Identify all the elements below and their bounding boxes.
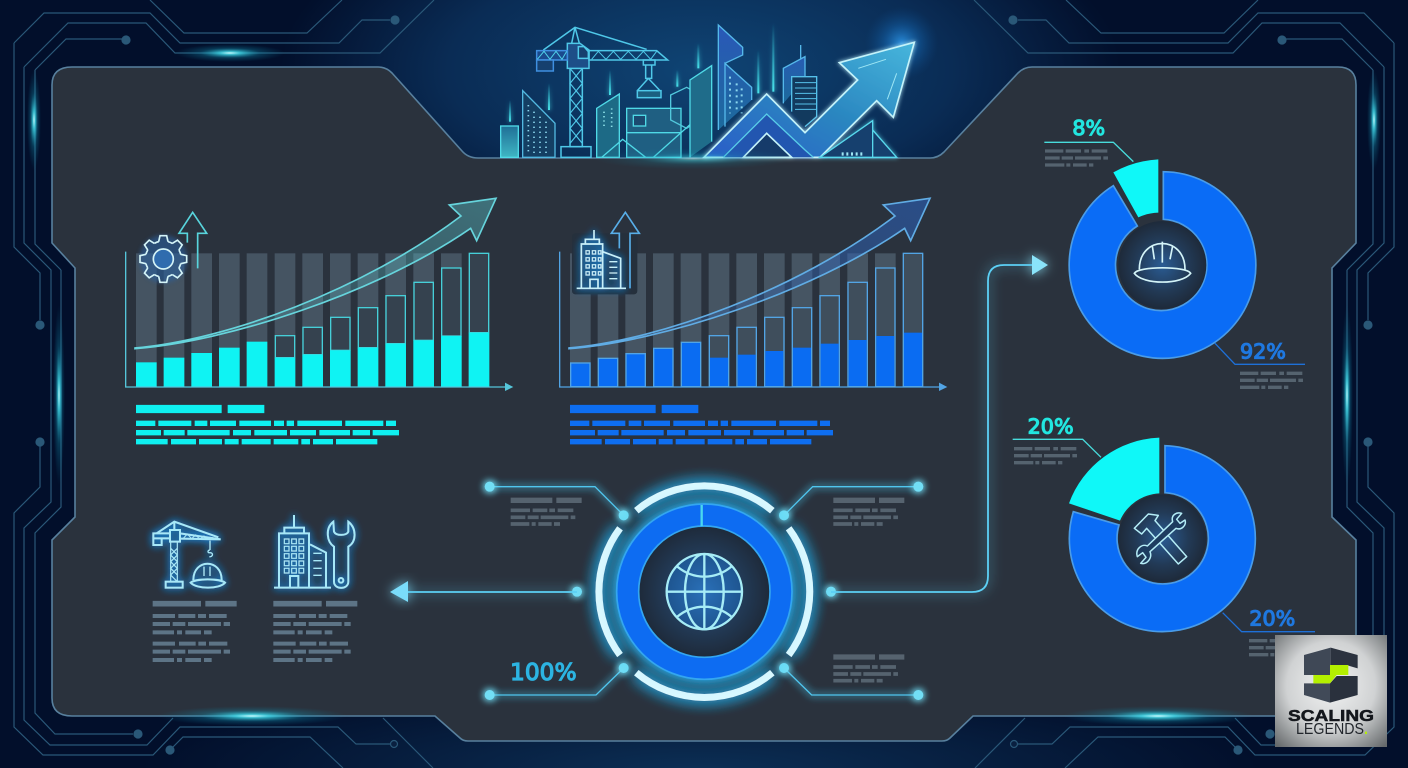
- blue segment: [1069, 446, 1255, 632]
- city buildings: [501, 25, 817, 157]
- light streaks: [509, 23, 774, 122]
- caption text bars: [136, 409, 399, 442]
- panel: cyan growth chart: [126, 198, 513, 442]
- background columns: [570, 253, 923, 387]
- icon: building and wrench: [274, 515, 355, 588]
- outer glowing arcs: [599, 486, 810, 697]
- 8% label: 8%: [1072, 116, 1105, 140]
- icon: gear with up arrow: [139, 212, 207, 283]
- hub centre: [639, 526, 770, 657]
- logo: Scaling Legends: [1275, 635, 1387, 747]
- panel: bottom-left icons and notes: [153, 515, 357, 660]
- arrow: hub to left icons: [390, 581, 577, 602]
- connector nodes: [485, 482, 923, 700]
- 8% segment: [1113, 159, 1158, 217]
- panel: blue growth chart: [560, 198, 947, 442]
- icon: globe: [667, 554, 742, 629]
- connectors: [490, 487, 918, 695]
- right 20% label: [1223, 607, 1315, 655]
- 20% segment: [1069, 438, 1159, 521]
- panel: central globe hub with connectors: [485, 482, 923, 700]
- rising zigzag arrow: [704, 42, 914, 157]
- icon: building with up arrow: [572, 212, 639, 294]
- cyan bars: [136, 333, 489, 387]
- outlined bar tops: [275, 253, 489, 358]
- axes: [126, 252, 513, 391]
- 92% segment: [1069, 172, 1256, 358]
- logo: Scaling Legends: LEGENDS.: [1296, 721, 1368, 738]
- blue bar fills: [710, 333, 922, 386]
- tower crane: [537, 27, 668, 157]
- logo mark: [1304, 648, 1358, 703]
- notes column 1: [153, 604, 237, 660]
- header illustration: city, crane and rising arrow: [485, 7, 938, 169]
- blue bars: [571, 253, 923, 387]
- ring divider: [698, 505, 705, 526]
- ring edge: [617, 504, 792, 679]
- notes column 2: [273, 604, 357, 660]
- note top right: [833, 500, 904, 524]
- icon: hard hat: [1134, 242, 1191, 282]
- hub: [1118, 494, 1206, 582]
- 100% label: 100%: [510, 658, 577, 686]
- trend arrow: [569, 198, 930, 349]
- 92% label: 92%: [1240, 339, 1286, 363]
- left 20% label: [1013, 414, 1101, 463]
- axes: [560, 252, 947, 391]
- donut chart: 20% / 20%: [1013, 414, 1315, 655]
- icon: crane and hard hat: [153, 522, 225, 588]
- glow behind arrow tip: [865, 7, 938, 80]
- blue ring: [628, 515, 781, 668]
- header baseline glow: [485, 148, 937, 169]
- left 20% label: 20%: [1028, 414, 1074, 438]
- 92% label: [1215, 339, 1305, 387]
- logo wordmark: SCALING: [1288, 708, 1374, 725]
- note top left: [511, 500, 582, 524]
- 8% label: [1044, 116, 1133, 165]
- arrow: hub to donut charts: [831, 255, 1048, 592]
- hub: [1118, 221, 1206, 309]
- donut chart: 8% / 92%: [1044, 116, 1305, 387]
- trend arrow: [135, 198, 496, 349]
- icon: hammer and wrench: [1134, 513, 1187, 564]
- note bottom right: [833, 657, 904, 681]
- background columns: [136, 253, 489, 387]
- right 20% label: 20%: [1249, 607, 1295, 631]
- caption text bars: [570, 409, 833, 442]
